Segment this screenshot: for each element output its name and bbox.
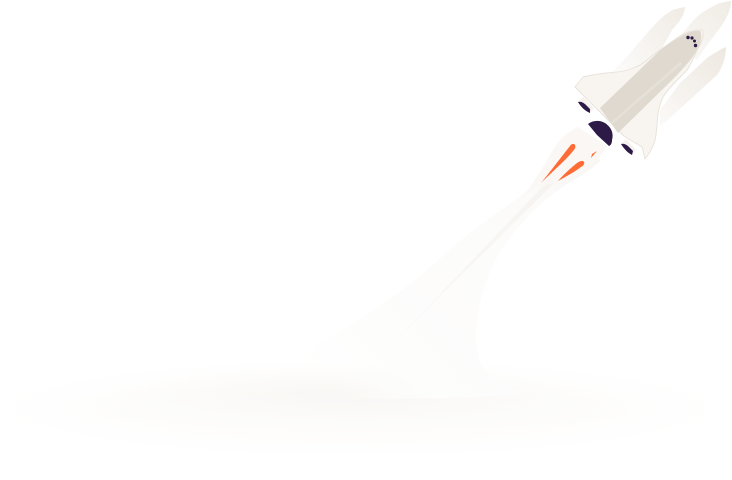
right engine nozzle — [621, 139, 636, 155]
exhaust flame — [528, 127, 607, 190]
external tank — [675, 1, 731, 60]
orange flame right — [558, 161, 584, 181]
left engine nozzle — [578, 97, 594, 113]
flame tail — [522, 176, 552, 198]
orange flame left — [541, 144, 575, 183]
exhaust trail — [225, 150, 601, 399]
right booster — [660, 47, 726, 126]
orange flame small — [591, 151, 597, 158]
ground smoke cloud — [0, 358, 732, 458]
rocket — [522, 1, 731, 198]
orbiter body — [575, 30, 703, 159]
fuselage highlight — [611, 62, 682, 124]
main engine nozzle — [588, 121, 613, 146]
cockpit windows — [686, 36, 697, 47]
orbiter fuselage — [600, 31, 701, 133]
left booster — [612, 7, 685, 72]
centre streak — [394, 179, 555, 342]
